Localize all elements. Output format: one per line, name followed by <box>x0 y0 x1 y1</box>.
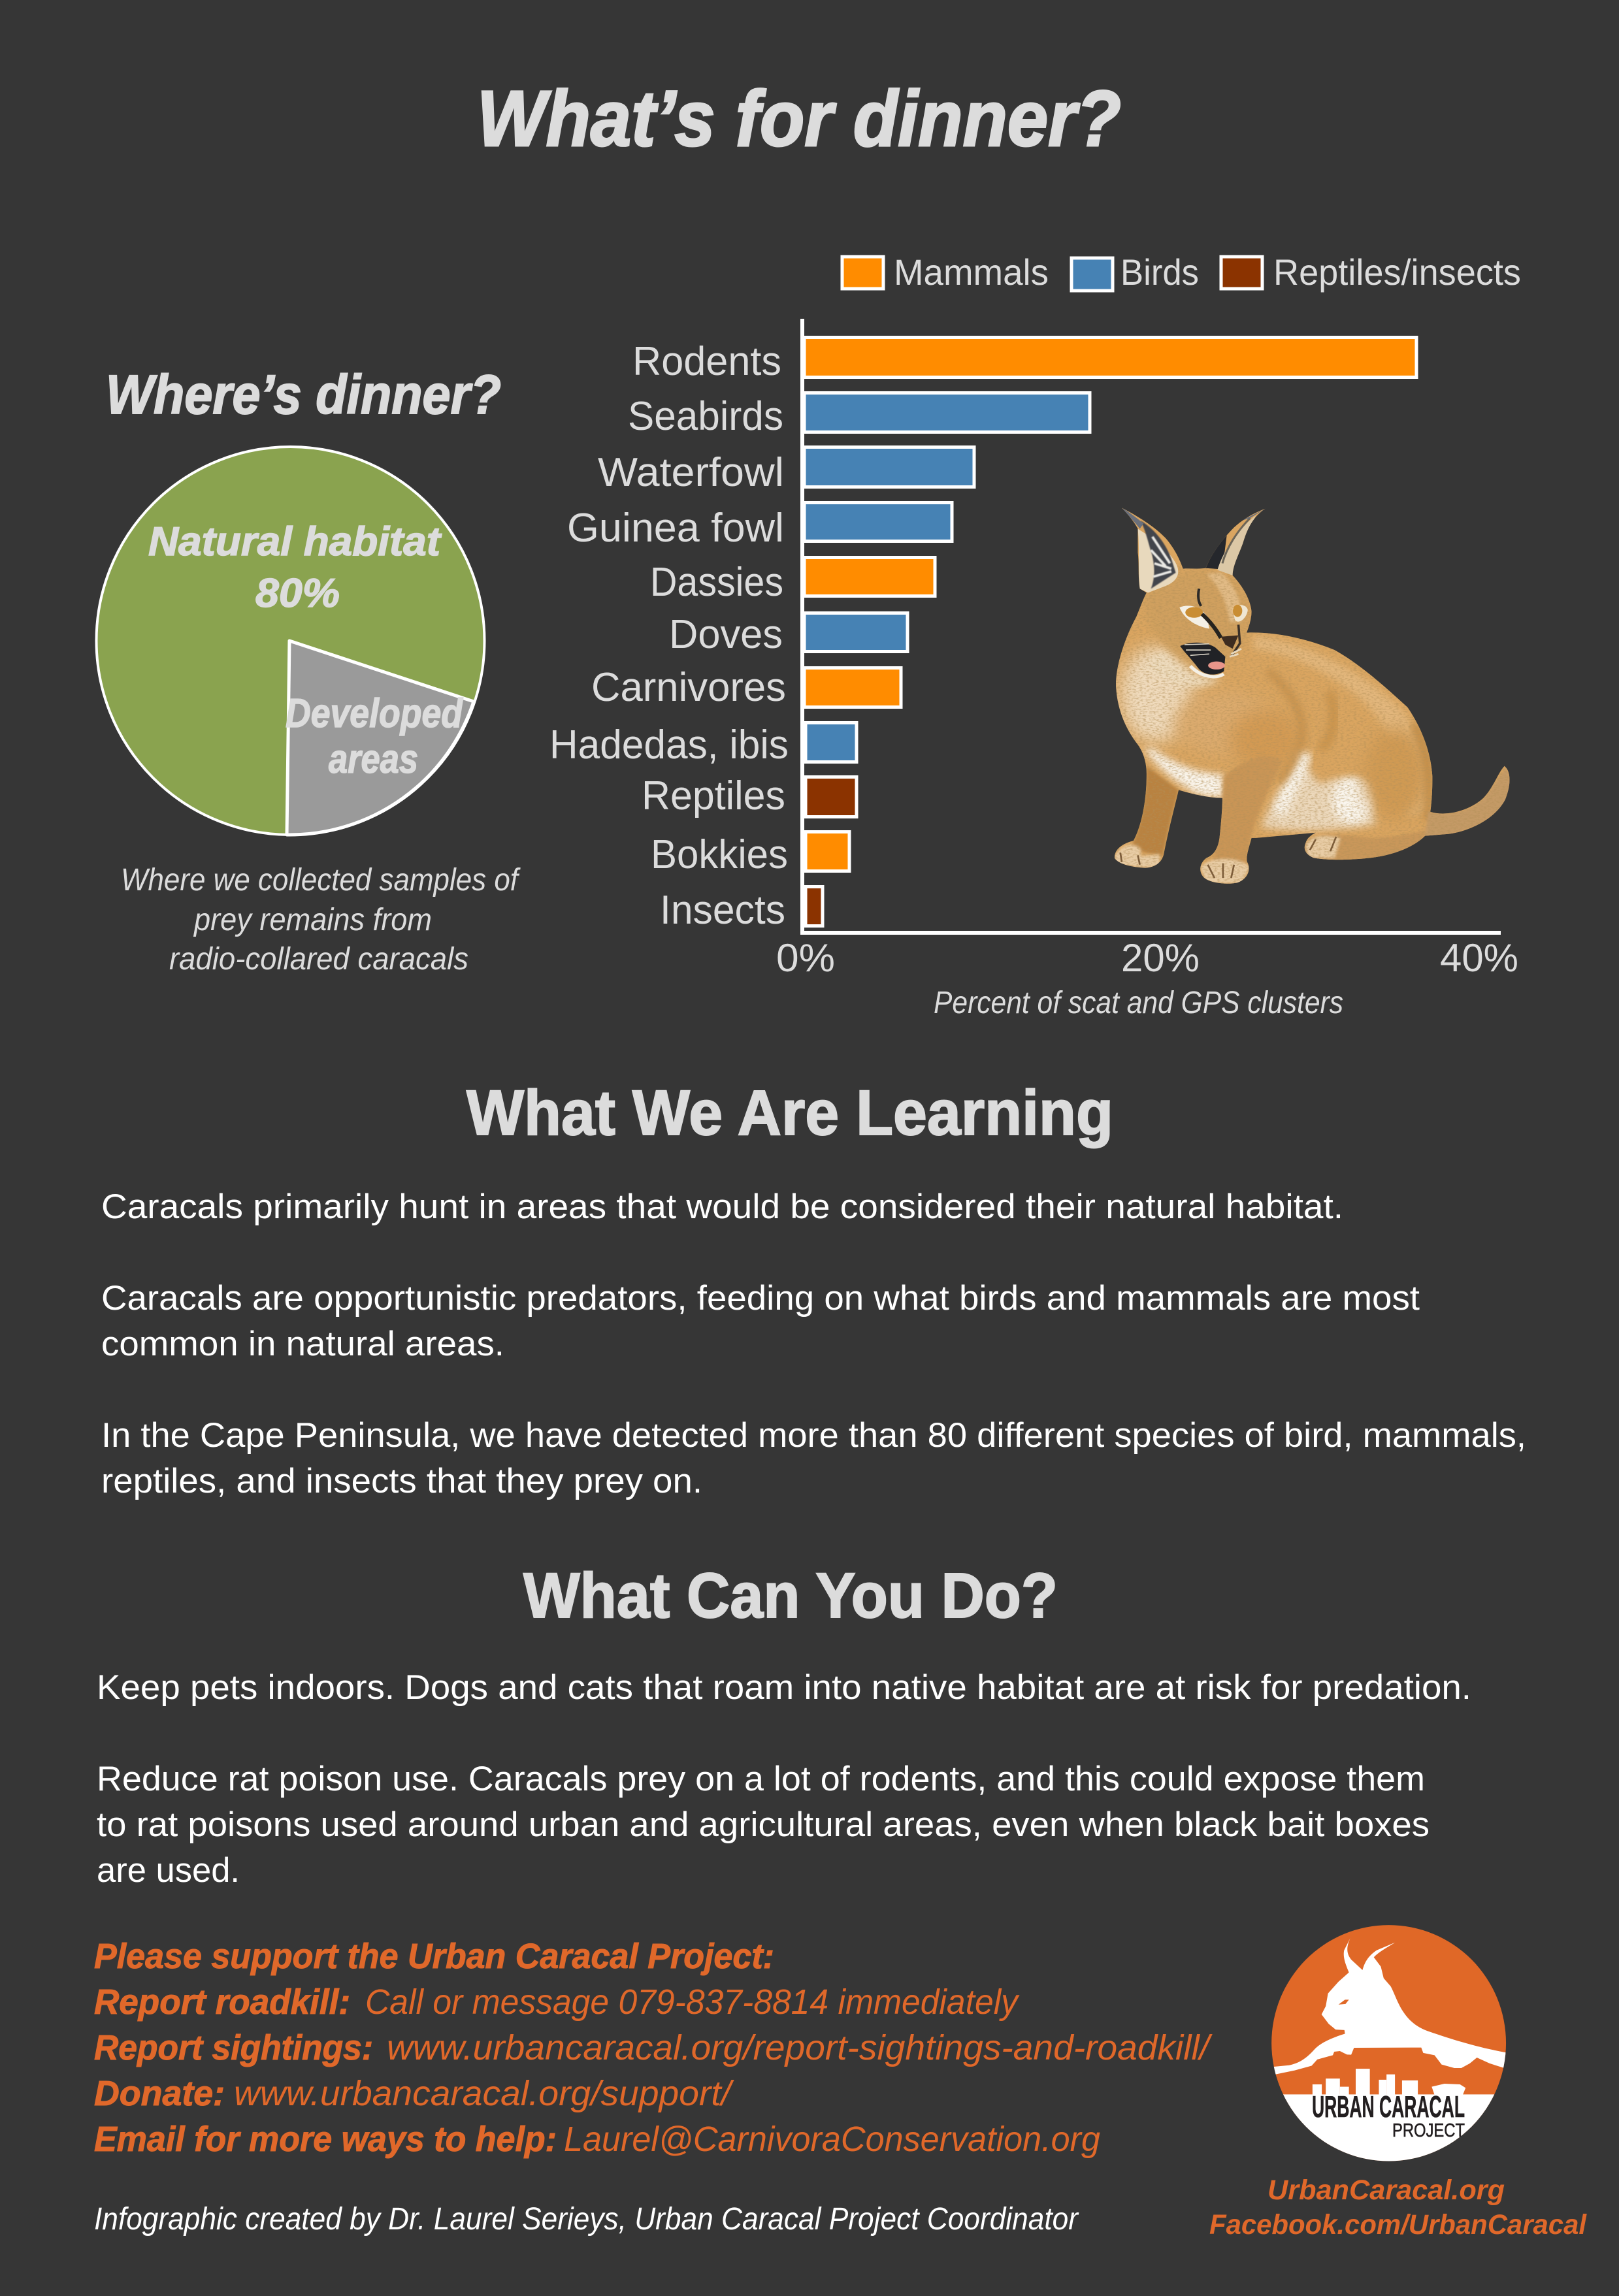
axis tick labels: 40% <box>1440 936 1518 980</box>
call to action text: Laurel@CarnivoraConservation.org <box>564 2120 1100 2159</box>
illustration: caracal <box>1107 499 1516 888</box>
paragraph 3: In the Cape Peninsula, we have detected more than 80 different species of bird, mammals, <box>101 1416 1526 1455</box>
logo: urban caracal project <box>1261 1925 1515 2165</box>
panel: where's dinner <box>97 364 521 977</box>
paw details <box>1120 837 1336 878</box>
section: what can you do <box>97 1560 1471 1890</box>
call to action text: www.urbancaracal.org/report-sightings-and-roadkill/ <box>387 2028 1213 2067</box>
call to action text: Report roadkill: <box>94 1982 350 2022</box>
axes <box>802 319 1501 933</box>
paragraph: reduce rat poison: to rat poisons used around urban and agricultural areas, even when black bait boxes <box>97 1805 1430 1844</box>
legend: Mammals <box>894 251 1049 293</box>
paragraph: reduce rat poison: Reduce rat poison use. Caracals prey on a lot of rodents, and this could expose them <box>97 1760 1425 1798</box>
credit line: Infographic created by Dr. Laurel Serieys, Urban Caracal Project Coordinator <box>94 2202 1079 2237</box>
logo wordmark: URBAN CARACAL <box>1312 2090 1465 2124</box>
call to action text: Report sightings: <box>94 2028 373 2067</box>
website and facebook links: Facebook.com/UrbanCaracal <box>1209 2209 1587 2240</box>
category labels: Rodents <box>632 339 781 384</box>
paragraph 3: reptiles, and insects that they prey on. <box>101 1462 702 1500</box>
legend: Reptiles/insects <box>1273 251 1521 293</box>
paragraph: keep pets indoors: Keep pets indoors. Dogs and cats that roam into native habitat are at risk for predation. <box>97 1668 1471 1707</box>
head <box>1143 569 1250 666</box>
title: What’s for dinner? <box>477 74 1121 163</box>
pie label: developed: Developed <box>286 691 463 736</box>
category labels: Carnivores <box>591 665 786 710</box>
pie caption: prey remains from <box>193 903 432 937</box>
call to action text: Please support the Urban Caracal Project: <box>94 1937 774 1976</box>
pie caption: Where we collected samples of <box>121 863 521 897</box>
category labels: Hadedas, ibis <box>549 722 789 768</box>
call to action text: www.urbancaracal.org/support/ <box>234 2074 734 2113</box>
pie caption <box>121 863 521 977</box>
category labels: Guinea fowl <box>567 506 784 551</box>
logo sub-wordmark: PROJECT <box>1392 2120 1465 2141</box>
pie chart <box>97 447 485 835</box>
paragraph 2: common in natural areas. <box>101 1325 504 1363</box>
paw highlights <box>1115 836 1341 883</box>
paragraph: reduce rat poison <box>97 1760 1430 1890</box>
category labels <box>549 339 789 933</box>
paragraph 2 <box>101 1279 1420 1363</box>
call to action text: Donate: <box>94 2074 225 2113</box>
category labels: Waterfowl <box>598 450 784 495</box>
heading: where's dinner: Where’s dinner? <box>106 364 501 425</box>
pie value: 80%: 80% <box>255 571 340 616</box>
heading: What Can You Do? <box>523 1560 1058 1631</box>
paragraph 2: Caracals are opportunistic predators, feeding on what birds and mammals are most <box>101 1279 1420 1318</box>
axis tick labels <box>776 936 1518 980</box>
axis tick labels: 0% <box>776 936 835 980</box>
legend <box>842 251 1521 293</box>
bar chart: percent of scat and GPS clusters <box>549 319 1518 1020</box>
face details <box>1179 589 1248 677</box>
bars <box>804 337 1416 926</box>
fur texture <box>1107 563 1516 888</box>
category labels: Seabirds <box>628 394 783 439</box>
legend: Birds <box>1120 251 1199 293</box>
call to action text: Email for more ways to help: <box>94 2120 557 2159</box>
pie caption: radio-collared caracals <box>169 942 468 977</box>
section: what we are learning <box>101 1077 1526 1500</box>
ears <box>1138 528 1178 592</box>
category labels: Insects <box>660 888 785 933</box>
call to action text <box>94 1937 1213 2159</box>
category labels: Reptiles <box>642 773 785 818</box>
category labels: Bokkies <box>651 832 788 877</box>
heading: What We Are Learning <box>466 1077 1113 1148</box>
paragraph: reduce rat poison: are used. <box>97 1851 240 1890</box>
pie label: natural habitat: Natural habitat <box>148 519 442 564</box>
call to action text: Call or message 079-837-8814 immediately <box>365 1982 1020 2022</box>
axis tick labels: 20% <box>1121 936 1200 980</box>
paragraph 1: Caracals primarily hunt in areas that would be considered their natural habitat. <box>101 1188 1343 1226</box>
paragraph 3 <box>101 1416 1526 1500</box>
axis title: Percent of scat and GPS clusters <box>934 986 1343 1020</box>
website and facebook links: UrbanCaracal.org <box>1267 2175 1505 2206</box>
pie label: areas: areas <box>329 737 418 782</box>
category labels: Dassies <box>650 560 783 605</box>
category labels: Doves <box>669 612 783 657</box>
website and facebook links <box>1209 2175 1587 2240</box>
